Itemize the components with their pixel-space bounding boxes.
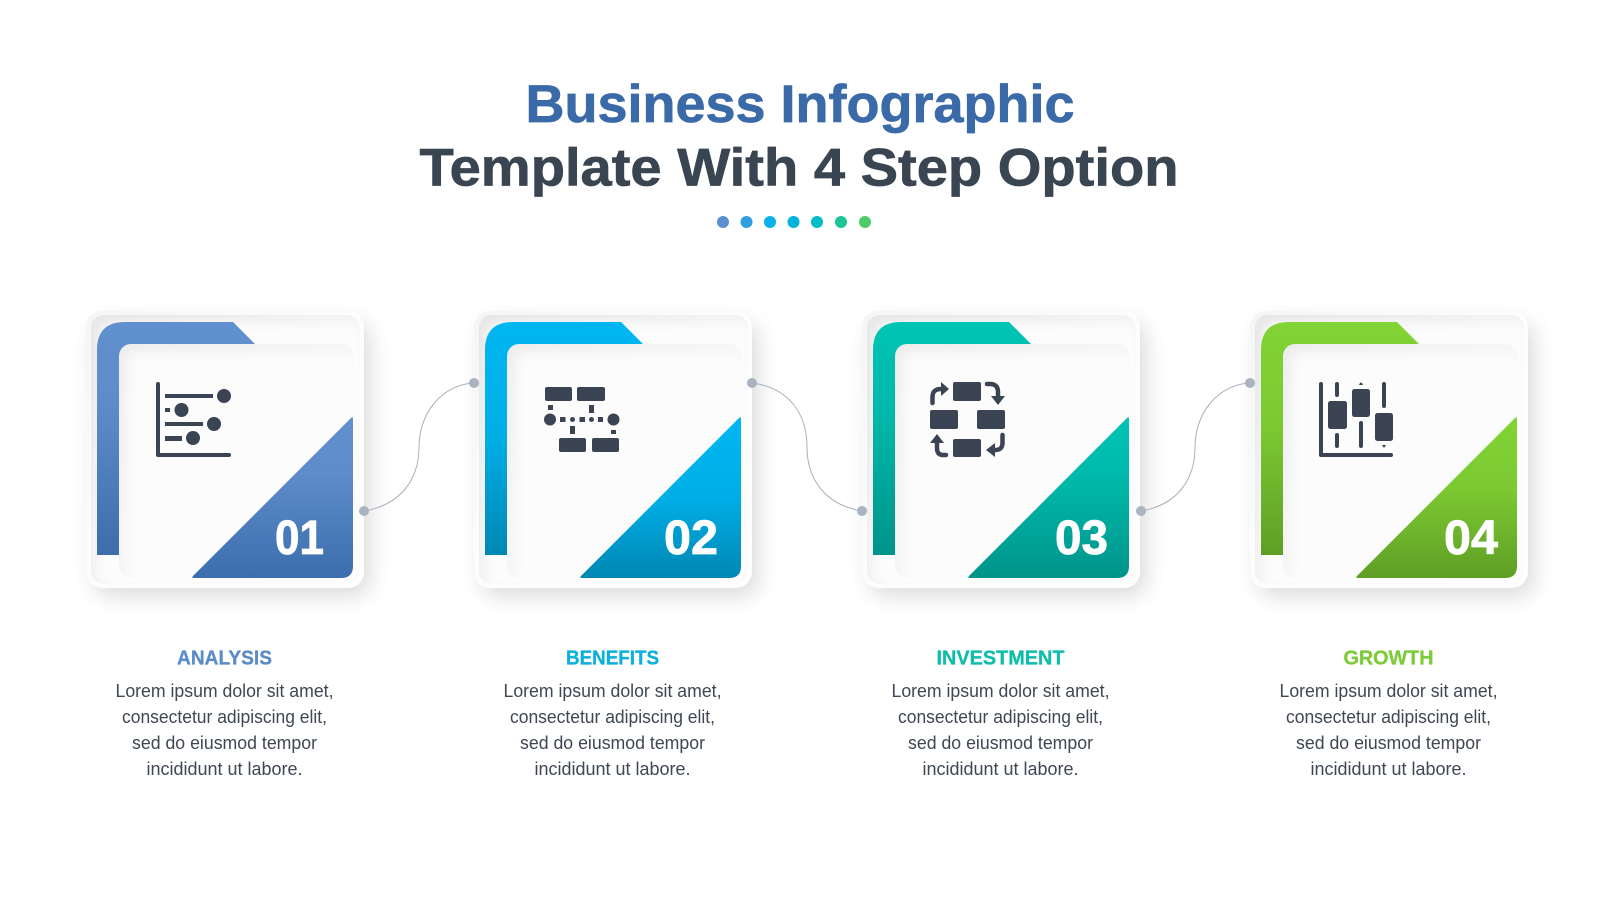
- text block: analysis: [116, 648, 334, 779]
- text block: investment: Lorem ipsum dolor sit amet,: [892, 681, 1110, 701]
- panel: step 01 analysis: [86, 311, 370, 596]
- number 04: 04: [1444, 512, 1498, 565]
- text block: growth: Lorem ipsum dolor sit amet,: [1280, 681, 1498, 701]
- text block: investment: incididunt ut labore.: [922, 759, 1078, 779]
- text block: investment: [892, 648, 1110, 779]
- icon: process flow blocks: [544, 387, 620, 452]
- panel: step 03 investment: [862, 311, 1146, 596]
- text block: growth: consectetur adipiscing elit,: [1286, 707, 1491, 727]
- text block: benefits: BENEFITS: [566, 648, 659, 670]
- text block: analysis: consectetur adipiscing elit,: [122, 707, 327, 727]
- title: Business Infographic: [526, 75, 1074, 134]
- text block: growth: incididunt ut labore.: [1310, 759, 1466, 779]
- text block: benefits: [504, 648, 722, 779]
- title: Template With 4 Step Option: [420, 138, 1178, 198]
- icon: candlestick chart: [1319, 382, 1393, 457]
- panel: step 04 growth: [1250, 311, 1534, 596]
- text block: growth: GROWTH: [1344, 648, 1434, 670]
- text block: benefits: consectetur adipiscing elit,: [510, 707, 715, 727]
- text block: analysis: incididunt ut labore.: [146, 759, 302, 779]
- folder tab: [97, 322, 255, 555]
- text block: investment: consectetur adipiscing elit,: [898, 707, 1103, 727]
- connector: step 3 to step 4: [1136, 378, 1255, 516]
- number 03: 03: [1055, 512, 1108, 565]
- text block: benefits: Lorem ipsum dolor sit amet,: [504, 681, 722, 701]
- title: [420, 75, 1178, 198]
- icon: dot plot chart: [156, 382, 231, 457]
- infographic canvas: [86, 83, 1542, 775]
- text block: analysis: ANALYSIS: [177, 648, 272, 670]
- icon: cycle of blocks: [930, 382, 1005, 457]
- number 01: 01: [275, 512, 324, 565]
- text block: investment: INVESTMENT: [936, 648, 1064, 670]
- text block: growth: sed do eiusmod tempor: [1296, 733, 1481, 753]
- number corner: [192, 417, 353, 578]
- text block: analysis: sed do eiusmod tempor: [132, 733, 317, 753]
- text block: analysis: Lorem ipsum dolor sit amet,: [116, 681, 334, 701]
- number 02: 02: [664, 512, 718, 565]
- text block: investment: sed do eiusmod tempor: [908, 733, 1093, 753]
- text block: benefits: sed do eiusmod tempor: [520, 733, 705, 753]
- connector: step 1 to step 2: [359, 378, 479, 516]
- panel: step 02 benefits: [474, 311, 758, 596]
- text block: benefits: incididunt ut labore.: [534, 759, 690, 779]
- text block: growth: [1280, 648, 1498, 779]
- connector: step 2 to step 3: [747, 378, 867, 516]
- decorative dots row: [717, 216, 871, 228]
